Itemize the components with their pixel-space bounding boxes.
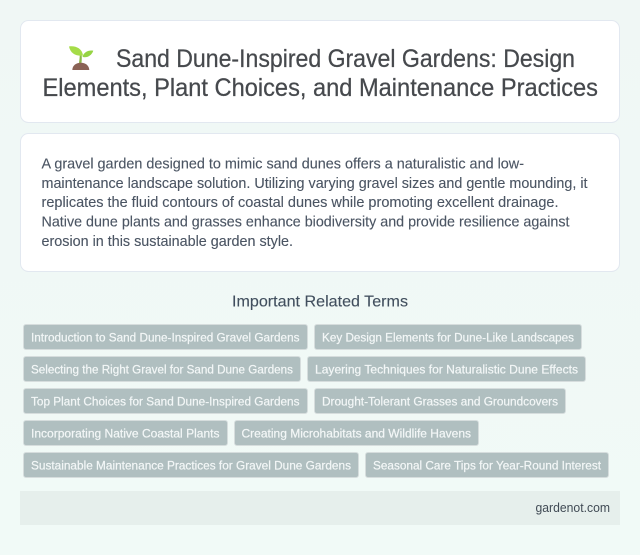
chip: Sustainable Maintenance Practices for Gravel Dune Gardens [31,458,351,472]
chip: Incorporating Native Coastal Plants [31,426,220,440]
chip: Creating Microhabitats and Wildlife Havens [242,426,471,440]
chip [314,388,566,414]
chip [24,420,228,446]
chip: Key Design Elements for Dune-Like Landscapes [322,330,574,344]
text block: description [42,156,588,250]
panel: description card [20,134,620,272]
text block: description: A gravel garden designed to mimic sand dunes offers a naturalistic and low- [42,156,524,172]
footer bar [20,491,620,525]
chip [234,420,478,446]
chip [24,388,308,414]
chip: Layering Techniques for Naturalistic Dune Effects [315,362,578,376]
text block: description: erosion in this sustainable garden style. [42,234,293,250]
panel: title card [20,20,620,122]
heading: related terms: Important Related Terms [232,294,408,310]
text block: description: maintenance landscape solution. Utilizing varying gravel sizes and gentle mounding, it [42,176,588,192]
chip: Top Plant Choices for Sand Dune-Inspired Gardens [31,394,300,408]
chip: Seasonal Care Tips for Year-Round Interest [373,458,602,472]
chip [24,324,308,350]
chip [24,452,358,478]
chip [314,324,582,350]
chip [308,356,586,382]
chip [366,452,608,478]
text block: description: replicates the fluid contours of coastal dunes while promoting excellent drainage. [42,195,558,211]
chip [24,356,300,382]
chip: Selecting the Right Gravel for Sand Dune Gardens [31,362,293,376]
title [42,45,598,102]
footer source text: gardenot.com [536,501,610,515]
chip: Introduction to Sand Dune-Inspired Gravel Gardens [31,330,300,344]
title: Sand Dune-Inspired Gravel Gardens: Design [116,45,575,73]
icon: seedling [69,46,93,70]
panel: related term chips [24,324,608,478]
title: Elements, Plant Choices, and Maintenance Practices [42,74,598,102]
text block: description: Native dune plants and grasses enhance biodiversity and provide resilience against [42,214,570,230]
chip: Drought-Tolerant Grasses and Groundcovers [322,394,558,408]
